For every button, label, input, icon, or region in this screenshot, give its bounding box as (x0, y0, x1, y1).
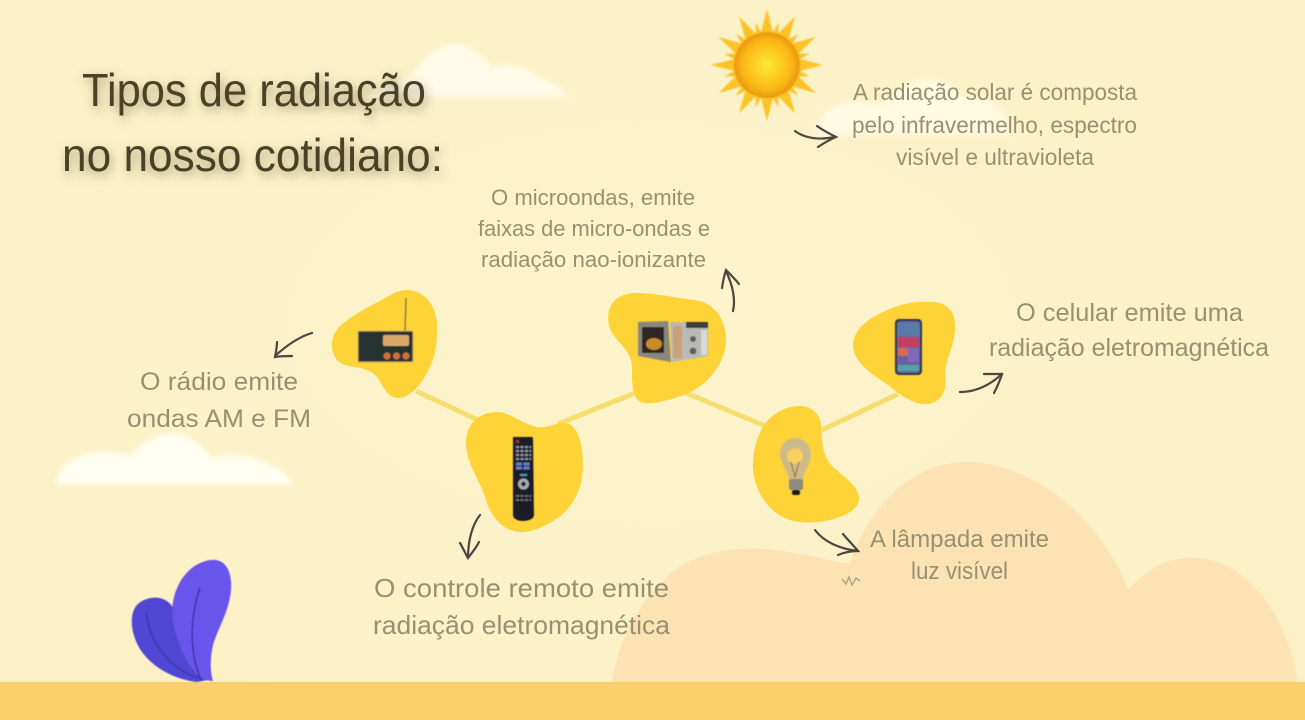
blob: remote control (466, 412, 583, 532)
text: solar radiation: A radiação solar é composta (853, 79, 1137, 105)
title: Tipos de radiação (82, 64, 426, 116)
icon: radio (358, 298, 413, 362)
icon: light bulb (780, 438, 811, 495)
icon: smartphone (895, 319, 922, 375)
text: solar radiation (852, 79, 1137, 170)
text: radio: ondas AM e FM (127, 405, 311, 433)
text: microwave: radiação nao-ionizante (481, 247, 706, 272)
cloud: top left (372, 44, 568, 97)
cloud: left (55, 434, 292, 484)
text: smartphone (989, 299, 1269, 362)
text: remote control (373, 573, 671, 640)
title (62, 64, 443, 181)
text: remote control: O controle remoto emite (374, 573, 669, 603)
text: microwave (478, 185, 710, 272)
ground (0, 682, 1305, 720)
decorative squiggle (842, 577, 860, 585)
text: light bulb: luz visível (911, 558, 1008, 585)
icon: microwave (638, 321, 708, 362)
arrow: microwave (722, 270, 739, 311)
text: microwave: O microondas, emite (491, 185, 695, 210)
text: microwave: faixas de micro-ondas e (478, 216, 710, 241)
text: solar radiation: visível e ultravioleta (896, 144, 1094, 170)
plant (132, 560, 231, 682)
connector lines (416, 391, 898, 431)
text: smartphone: radiação eletromagnética (989, 334, 1269, 362)
text: light bulb: A lâmpada emite (870, 526, 1049, 553)
hills (612, 462, 1298, 682)
text: light bulb (870, 526, 1049, 585)
arrow: remote control (460, 515, 480, 558)
plant: front leaf (172, 560, 231, 681)
arrow: sun (795, 126, 836, 147)
text: radio (127, 368, 311, 433)
plant: back leaf (132, 598, 208, 682)
icon: remote control (513, 437, 534, 521)
text: smartphone: O celular emite uma (1016, 299, 1243, 327)
text: remote control: radiação eletromagnética (373, 610, 671, 640)
text: radio: O rádio emite (140, 368, 298, 396)
cloud: behind sun text (815, 80, 1010, 135)
icon: sun (711, 9, 823, 121)
blob: microwave (608, 293, 726, 403)
blob: light bulb (753, 406, 859, 522)
arrow: light bulb (815, 530, 858, 555)
text: solar radiation: pelo infravermelho, espectro (852, 112, 1137, 138)
arrow: radio (275, 333, 312, 357)
blob: smartphone (853, 302, 955, 404)
blob: radio (332, 290, 437, 398)
arrow: smartphone (960, 374, 1002, 393)
title: no nosso cotidiano: (62, 129, 443, 181)
